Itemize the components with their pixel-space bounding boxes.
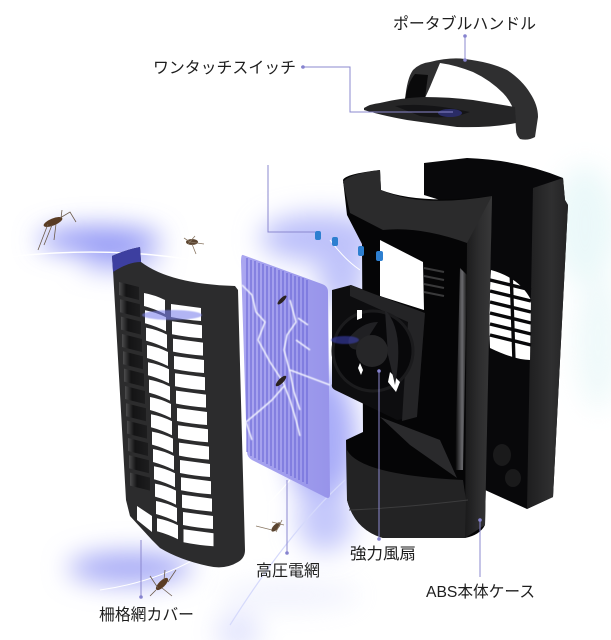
ABS body case — [343, 158, 568, 538]
blue connector pins — [315, 231, 383, 261]
white windows — [137, 293, 214, 546]
powerful fan — [331, 285, 425, 421]
front frame — [343, 170, 492, 538]
leader lines — [141, 36, 480, 597]
front window — [380, 240, 424, 310]
label: one-touch switch: ワンタッチスイッチ — [153, 59, 296, 77]
side ribs window — [424, 268, 444, 296]
front top band — [343, 170, 492, 244]
portable handle lid — [364, 58, 538, 140]
front lower tray — [347, 450, 466, 538]
dark left windows — [119, 282, 150, 491]
lightning bolts — [242, 285, 330, 440]
high-voltage mesh panel — [241, 255, 330, 498]
mosquito near panel bottom — [256, 520, 284, 533]
grille cover — [112, 247, 245, 567]
mosquito top left — [38, 210, 76, 250]
mosquito bottom — [150, 570, 176, 596]
glow on grille — [142, 310, 202, 320]
front right pillar — [465, 196, 492, 538]
vent in back half — [489, 270, 531, 360]
label: ABS body case: ABS本体ケース — [426, 583, 535, 601]
label: portable handle: ポータブルハンドル — [393, 14, 536, 33]
mesh lines — [247, 258, 307, 484]
label: grille cover: 柵格網カバー — [99, 606, 194, 624]
glossy wedge — [380, 417, 457, 478]
back half of case — [424, 158, 568, 509]
background glow streaks — [8, 165, 611, 640]
label: powerful fan: 強力風扇 — [350, 545, 416, 563]
label: high-voltage mesh: 高圧電網 — [256, 562, 320, 580]
mosquito top centre — [184, 236, 204, 254]
dark cylinders in lower back — [493, 444, 521, 487]
insects on mesh — [274, 294, 288, 388]
